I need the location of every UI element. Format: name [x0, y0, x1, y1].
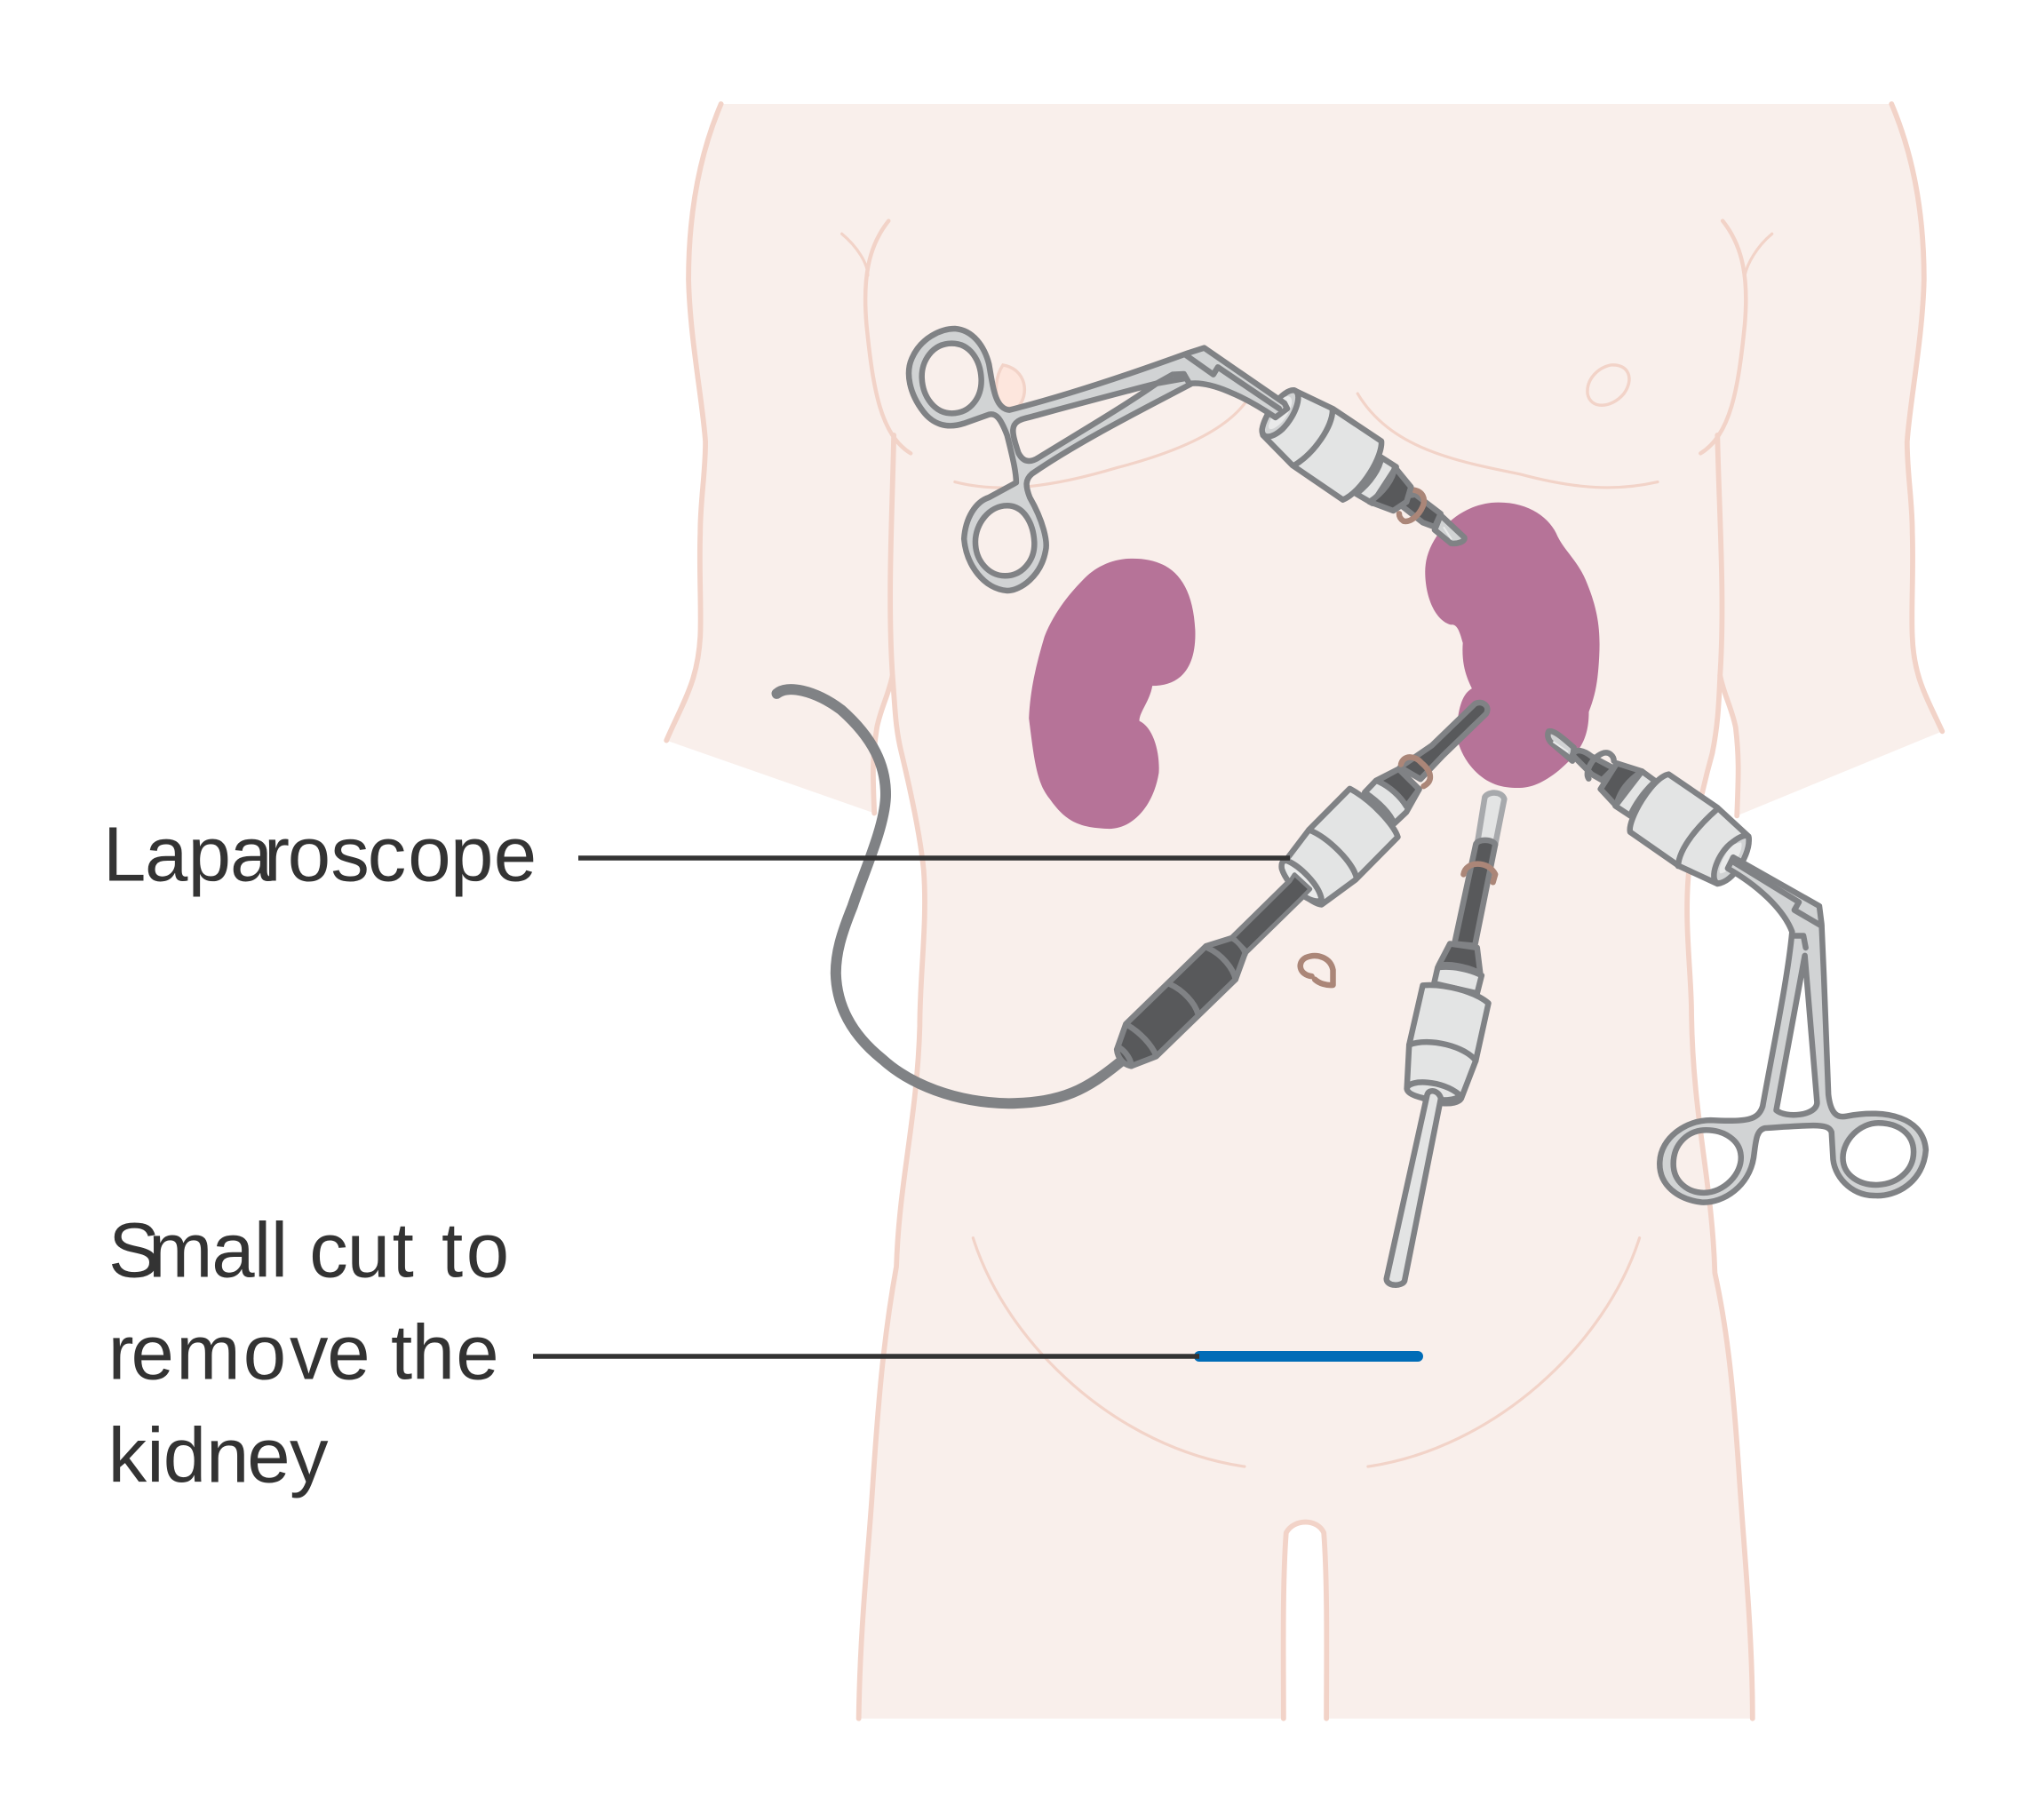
laparoscope port collar — [1365, 769, 1419, 823]
middle port and rod — [1387, 793, 1504, 1285]
right inner arm contour — [1720, 675, 1739, 815]
right forceps through port — [1659, 857, 1926, 1203]
navel — [1301, 956, 1333, 985]
label: Small cut to remove the kidney: kidney — [108, 1412, 329, 1498]
leader line: small cut — [533, 1354, 1199, 1359]
body outline — [666, 104, 1942, 1719]
laparoscope shaft — [1232, 877, 1310, 952]
laparoscope handle — [1117, 938, 1245, 1066]
left inner arm contour — [873, 675, 893, 813]
left arm and shoulder contour — [666, 104, 721, 741]
top forceps through port — [909, 329, 1287, 591]
right nipple — [1587, 365, 1629, 405]
right arm and shoulder contour — [1891, 104, 1942, 731]
blue incision — [1199, 1351, 1418, 1362]
laparoscope tip — [1400, 703, 1487, 779]
right torso contour — [1687, 435, 1753, 1719]
armpit and chest creases — [842, 221, 1772, 488]
left nipple — [996, 365, 1024, 408]
groin creases — [973, 1238, 1640, 1466]
label: Small cut to remove the kidney: Small cut to — [108, 1207, 509, 1293]
inner legs contour — [1284, 1522, 1326, 1719]
laparoscope cable — [776, 689, 1122, 1103]
laparoscope — [776, 689, 1430, 1103]
left torso contour — [859, 435, 925, 1719]
label: Small cut to remove the kidney: remove the — [108, 1310, 499, 1396]
right port with ring — [1548, 731, 1749, 884]
left kidney — [1029, 559, 1195, 829]
leader line: Laparoscope — [578, 855, 1290, 861]
laparoscope port body — [1282, 789, 1397, 904]
top port with ring — [1262, 390, 1465, 544]
label: Laparoscope: Laparoscope — [103, 812, 537, 898]
label: Small cut to remove the kidney — [108, 1207, 509, 1498]
laparoscope port ring — [1401, 757, 1430, 786]
right kidney — [1425, 503, 1600, 788]
